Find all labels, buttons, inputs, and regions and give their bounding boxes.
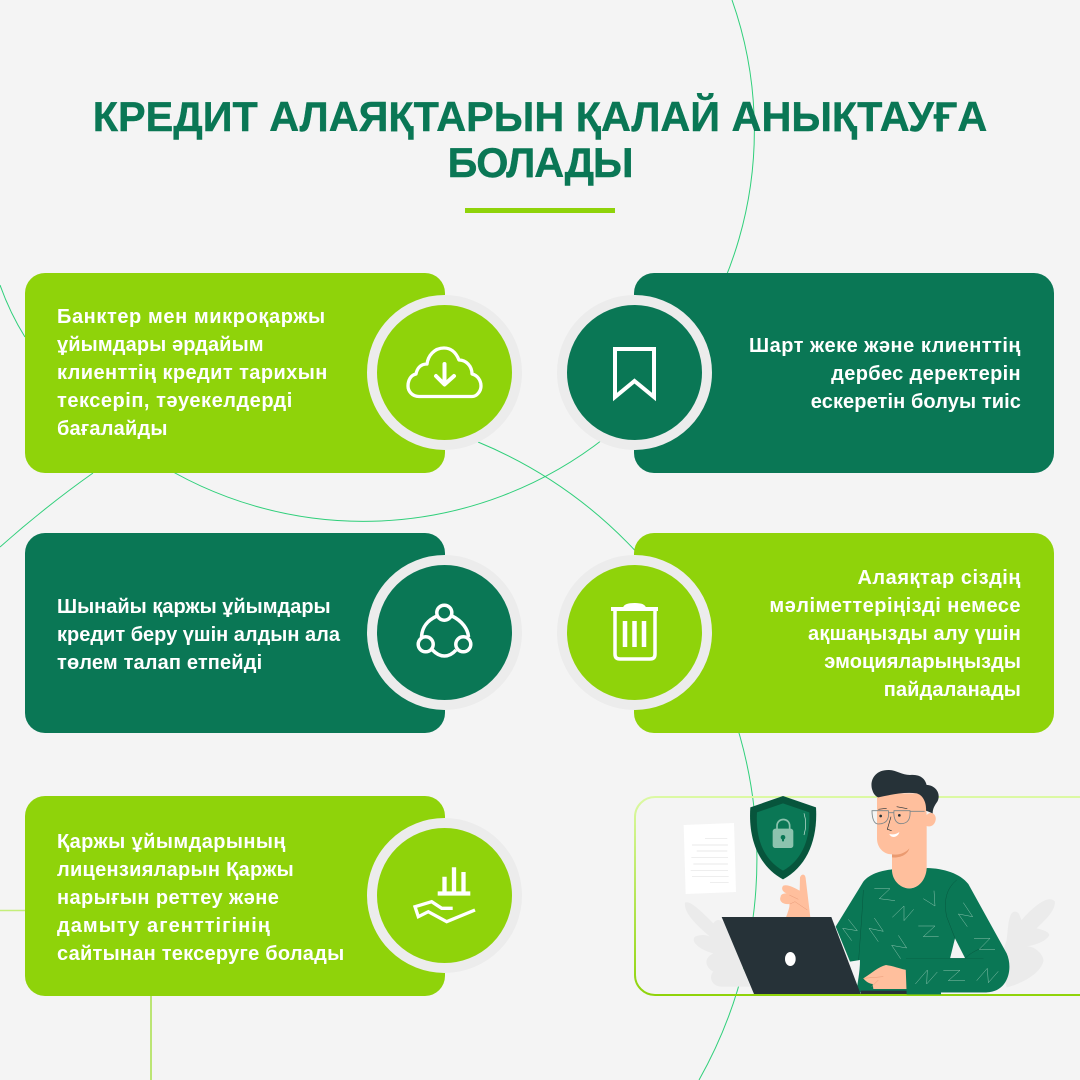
hair: [871, 770, 939, 813]
text: licence check: лицензияларын Қаржы: [57, 859, 294, 881]
text: no prepayment: [57, 596, 340, 674]
panel: licence check: [25, 796, 445, 996]
title underline: [465, 208, 615, 213]
text: emotions: пайдаланады: [884, 679, 1021, 701]
text: credit history: клиенттің кредит тарихын: [57, 362, 328, 384]
text: licence check: Қаржы ұйымдарының: [57, 831, 286, 853]
icon: trash bin: [557, 555, 712, 710]
text: emotions: эмоцияларыңызды: [824, 651, 1021, 673]
icon: cloud download: [367, 295, 522, 450]
text: personal contract: дербес деректерін: [831, 363, 1021, 385]
shield: [750, 796, 816, 879]
icon: bookmark: [557, 295, 712, 450]
pointing hand: [780, 875, 810, 917]
paper: [684, 823, 736, 894]
head and neck: [877, 793, 936, 888]
text: licence check: [57, 831, 344, 965]
title: [93, 93, 987, 186]
panel: no prepayment: [25, 533, 445, 733]
panel: personal contract: [634, 273, 1054, 473]
text: licence check: дамыту агенттігінің: [57, 915, 271, 937]
panel: credit history: [25, 273, 445, 473]
text: credit history: [57, 306, 328, 440]
text: personal contract: ескеретін болуы тиіс: [811, 391, 1021, 413]
text: emotions: мәліметтеріңізді немесе: [769, 595, 1021, 617]
leaves: [685, 902, 750, 987]
lock: [777, 819, 790, 830]
title: БОЛАДЫ: [448, 140, 632, 186]
typing hand: [863, 965, 909, 989]
text: no prepayment: Шынайы қаржы ұйымдары: [57, 596, 331, 618]
text: personal contract: [749, 335, 1021, 413]
text: no prepayment: кредит беру үшін алдын ала: [57, 624, 340, 646]
text: personal contract: Шарт жеке және клиенттің: [749, 335, 1021, 357]
text: licence check: сайтынан тексеруге болады: [57, 943, 344, 965]
text: emotions: [769, 567, 1021, 701]
text: no prepayment: төлем талап етпейді: [57, 652, 262, 674]
glasses and face: [872, 811, 925, 824]
text: emotions: ақшаңызды алу үшін: [808, 623, 1021, 645]
text: emotions: Алаяқтар сіздің: [857, 567, 1021, 589]
icon: hand with chart: [367, 818, 522, 973]
text: credit history: Банктер мен микроқаржы: [57, 306, 326, 328]
sweater: [836, 868, 1009, 992]
text: credit history: ұйымдары әрдайым: [57, 334, 264, 356]
sweater cuff: [905, 958, 987, 994]
title: КРЕДИТ АЛАЯҚТАРЫН ҚАЛАЙ АНЫҚТАУҒА: [93, 94, 987, 140]
text: credit history: тексеріп, тәуекелдерді: [57, 390, 293, 412]
icon: three connected circles: [367, 555, 522, 710]
text: licence check: нарығын реттеу және: [57, 887, 279, 909]
panel: emotions: [634, 533, 1054, 733]
laptop: [722, 917, 861, 994]
text: credit history: бағалайды: [57, 418, 168, 440]
